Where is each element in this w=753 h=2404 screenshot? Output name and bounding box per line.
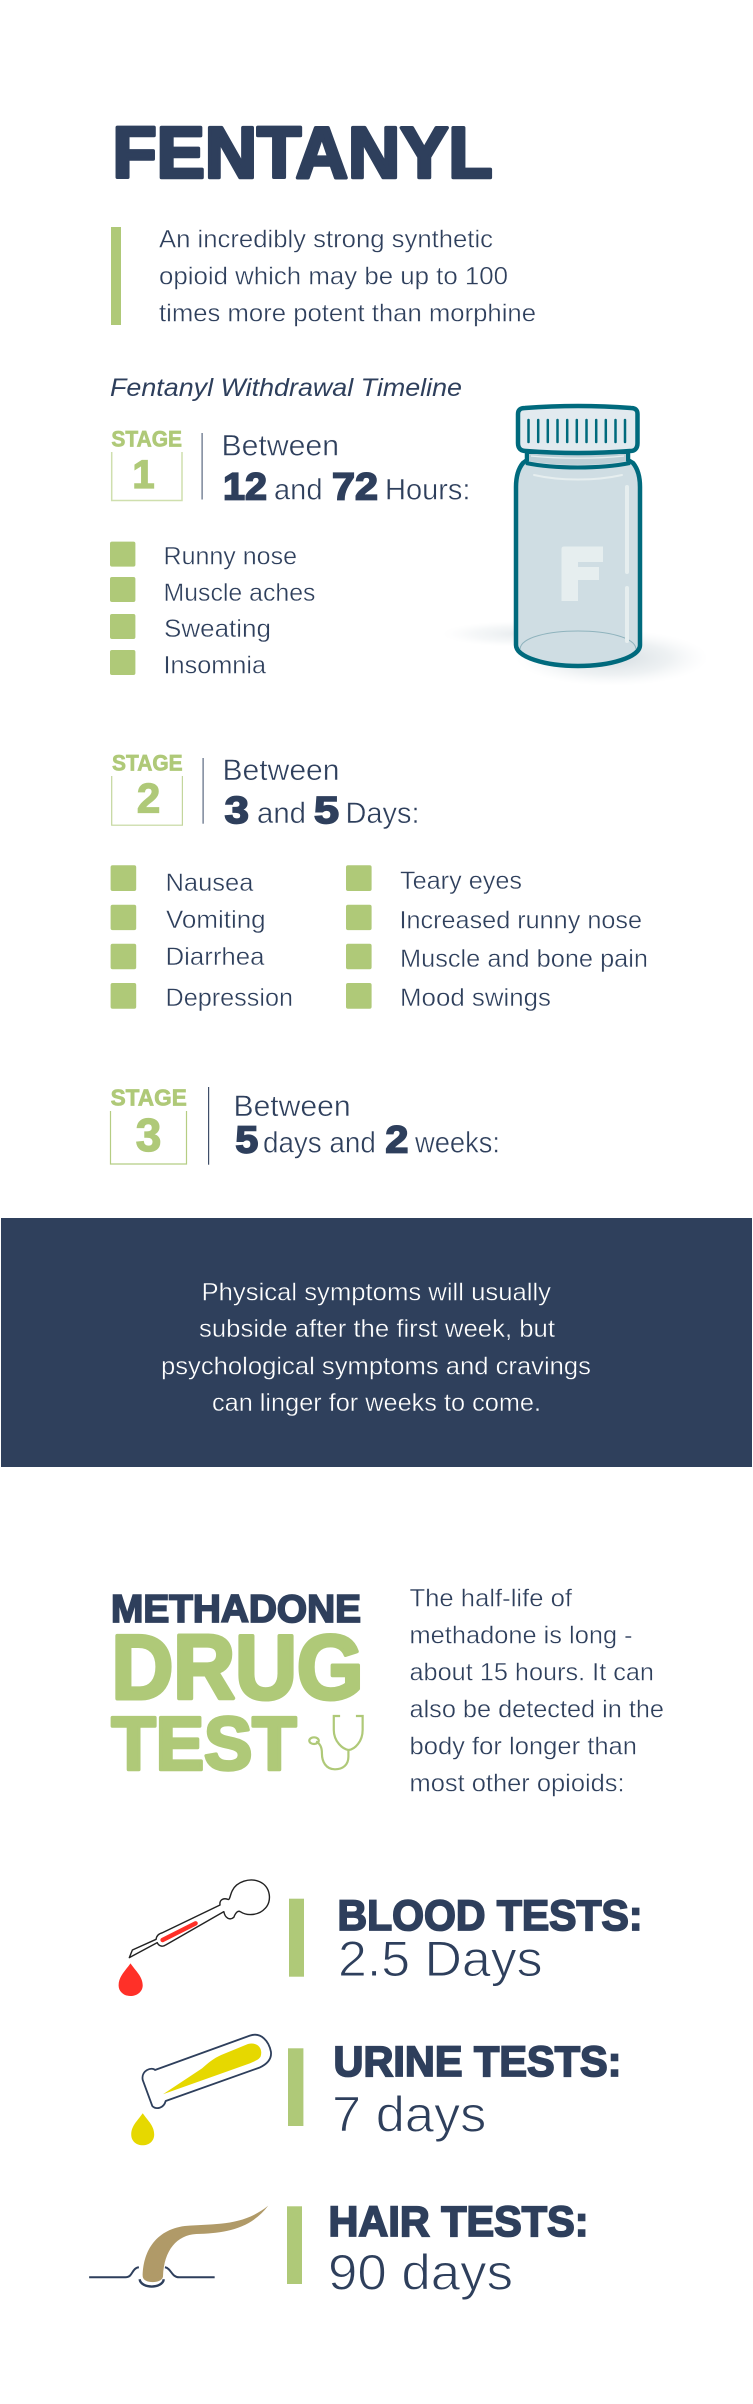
stage 2 symptoms, left column (111, 865, 293, 1012)
callout text: can linger for weeks to come. (212, 1389, 541, 1417)
callout text (161, 1279, 591, 1417)
stage 1 symptoms: Muscle aches (164, 579, 316, 607)
methadone description: The half-life of (410, 1585, 572, 1613)
banner background (1, 1218, 752, 1467)
stage 1 duration: Hours: (385, 474, 470, 506)
stage 1 duration: 72 (332, 466, 378, 508)
stage 2 badge (112, 751, 183, 825)
panel: stage 3 (110, 1085, 500, 1165)
icon: dropper with blood (119, 1880, 269, 1996)
blood tests value: 2.5 Days (338, 1931, 543, 1987)
panel: methadone drug test (111, 1585, 664, 1798)
stage 1 symptoms (110, 542, 316, 680)
stage 3 duration: 5 (235, 1120, 258, 1162)
stage 3 duration (234, 1090, 500, 1162)
timeline heading: Fentanyl Withdrawal Timeline (110, 374, 462, 402)
stage 2 symptoms, right column: Muscle and bone pain (400, 945, 648, 973)
stage 2 duration: Days: (346, 797, 420, 830)
methadone description: body for longer than (410, 1733, 637, 1761)
stage 2 duration: and (257, 797, 306, 830)
stage 2 symptoms, left column: Nausea (166, 869, 253, 897)
heading: methadone drug test: DRUG (112, 1618, 364, 1718)
panel: stage 1 (110, 427, 470, 680)
stage 1 symptoms: Insomnia (164, 652, 266, 680)
stage 2 symptoms, left column: Vomiting (166, 906, 266, 934)
icon: fentanyl bottle (442, 406, 708, 686)
heading: methadone drug test: TEST (112, 1702, 296, 1786)
stage 2 symptoms, right column: Mood swings (400, 984, 551, 1012)
stage 1 duration: 12 (223, 466, 267, 508)
stage 2 symptoms, right column: Teary eyes (400, 867, 522, 895)
intro text: opioid which may be up to 100 (159, 262, 508, 290)
stage 3 duration: weeks: (414, 1127, 500, 1160)
stage 3 duration: days and (263, 1127, 376, 1160)
stage 2 symptoms, right column: Increased runny nose (400, 906, 642, 934)
stage 2 symptoms, right column (346, 865, 648, 1012)
methadone description: methadone is long - (410, 1622, 633, 1650)
stage 1 badge: 1 (132, 453, 155, 497)
icon: test tube with urine (131, 2035, 271, 2145)
methadone description: about 15 hours. It can (410, 1659, 654, 1687)
stage 2 duration: Between (222, 754, 340, 787)
hair tests value: 90 days (328, 2244, 513, 2300)
callout text: psychological symptoms and cravings (161, 1352, 591, 1380)
stage 2 duration (222, 754, 420, 832)
stage 2 divider (202, 758, 204, 824)
stage 1 duration: Between (222, 430, 339, 462)
panel: callout banner (1, 1218, 752, 1467)
heading: methadone drug test: METHADONE (111, 1588, 361, 1631)
stage 1 divider (202, 433, 203, 500)
accent bar (111, 227, 121, 325)
intro text: An incredibly strong synthetic (159, 226, 493, 254)
stage 2 badge: 2 (137, 775, 160, 822)
stage 3 badge: STAGE (111, 1085, 187, 1111)
heading: methadone drug test (111, 1588, 364, 1786)
stage 2 symptoms, left column: Diarrhea (166, 943, 265, 971)
methadone description: most other opioids: (410, 1770, 625, 1798)
blood tests label: BLOOD TESTS: (338, 1892, 642, 1940)
icon: hair follicle (89, 2206, 268, 2287)
icon: stethoscope (309, 1716, 363, 1769)
stage 3 duration: 2 (385, 1120, 408, 1162)
stage 2 duration: 3 (225, 790, 249, 832)
stage 3 divider (208, 1087, 209, 1165)
methadone description (410, 1585, 664, 1798)
intro text: times more potent than morphine (159, 300, 536, 328)
stage 1 symptoms: Runny nose (164, 542, 297, 570)
stage 3 duration: Between (234, 1090, 351, 1123)
title: FENTANYL (112, 114, 492, 194)
stage 2 duration: 5 (314, 790, 339, 832)
stage 3 badge: 3 (136, 1109, 161, 1161)
stage 3 badge (110, 1085, 187, 1164)
accent bar (287, 2206, 302, 2284)
panel: urine tests (131, 2035, 622, 2145)
accent bar (289, 1899, 304, 1977)
stage 1 duration (222, 430, 470, 508)
panel: blood tests (119, 1880, 642, 1996)
urine tests value: 7 days (332, 2087, 486, 2143)
hair tests label: HAIR TESTS: (328, 2198, 588, 2246)
methadone description: also be detected in the (410, 1696, 664, 1724)
panel: hair tests (89, 2198, 588, 2300)
stage 1 badge: STAGE (111, 427, 182, 452)
accent bar (288, 2048, 303, 2126)
stage 1 symptoms: Sweating (164, 615, 271, 643)
intro text (159, 226, 536, 328)
urine tests label: URINE TESTS: (334, 2038, 622, 2086)
panel: intro (111, 226, 536, 328)
callout text: Physical symptoms will usually (202, 1279, 552, 1307)
stage 1 badge (111, 427, 182, 500)
stage 1 duration: and (274, 474, 322, 506)
panel: stage 2 (111, 751, 648, 1012)
callout text: subside after the first week, but (199, 1315, 555, 1343)
stage 2 badge: STAGE (112, 751, 183, 776)
stage 2 symptoms, left column: Depression (166, 984, 293, 1012)
